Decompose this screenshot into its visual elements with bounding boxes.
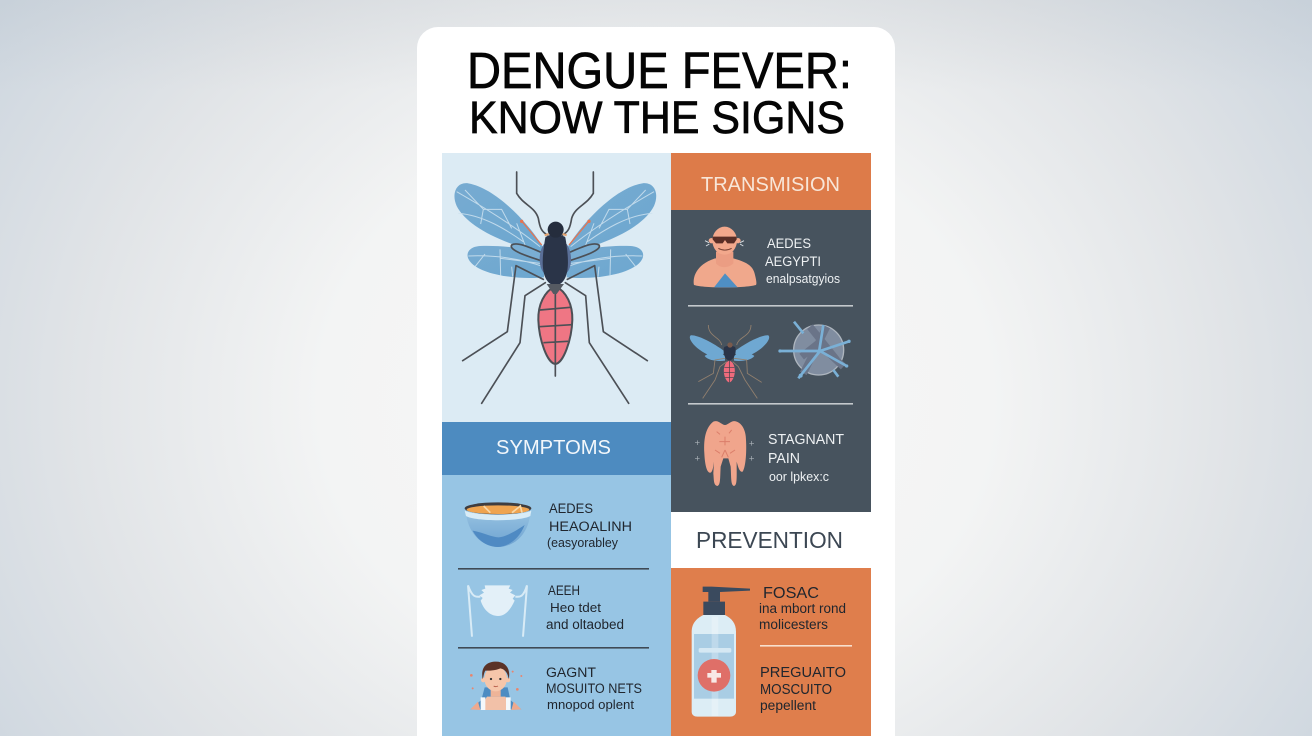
icon: man with sunglasses (694, 227, 756, 287)
icon: blocked net circle (778, 322, 851, 378)
symptom text: headache: AEDES (549, 501, 593, 516)
heading: prevention: PREVENTION (696, 527, 843, 553)
icon: small mosquito (690, 325, 769, 398)
symptom text: nets: GAGNT (546, 665, 596, 680)
transmission text: stagnant pain: PAIN (768, 451, 800, 467)
panel: prevention (671, 568, 871, 736)
transmission text: stagnant pain (768, 432, 844, 484)
infographic card (417, 27, 895, 736)
symptom text: headache: (easyorabley (547, 535, 618, 550)
transmission text: stagnant pain: oor lpkex:c (769, 469, 829, 484)
transmission text: stagnant pain: STAGNANT (768, 432, 844, 448)
prevention text: soap: ina mbort rond (759, 601, 846, 616)
symptom text: fever (546, 583, 624, 632)
icon: boy with symptoms (470, 662, 522, 710)
symptom text: fever: AEEH (548, 583, 580, 598)
title: DENGUE FEVER: (467, 42, 852, 99)
panel: symptoms heading (442, 422, 671, 475)
symptom text: headache (547, 501, 632, 550)
prevention text: soap (759, 585, 846, 632)
panel: transmission list (671, 210, 871, 512)
prevention text: mosquito repellent (760, 665, 846, 713)
symptom text: headache: HEAOALINH (549, 519, 632, 534)
symptom text: fever: and oltaobed (546, 617, 624, 632)
transmission text: aedes aegypti: enalpsatgyios (766, 271, 840, 286)
panel: transmission heading: TRANSMISION (701, 174, 840, 196)
prevention text: mosquito repellent: MOSCUITO (760, 682, 832, 698)
icon: skin rash hand (695, 421, 754, 486)
icon: large mosquito (454, 172, 656, 403)
prevention text: soap: molicesters (759, 617, 828, 632)
symptom text: fever: Heo tdet (550, 600, 601, 615)
prevention text: mosquito repellent: pepellent (760, 698, 816, 713)
symptom text: nets (546, 665, 642, 712)
title (467, 42, 852, 143)
panel: symptoms heading: SYMPTOMS (496, 436, 611, 459)
title: KNOW THE SIGNS (469, 92, 845, 143)
symptom text: nets: MOSUITO NETS (546, 681, 642, 696)
prevention text: soap: FOSAC (763, 585, 819, 602)
icon: white garment (468, 585, 527, 637)
panel: symptoms list (442, 475, 671, 736)
transmission text: aedes aegypti: AEDES (767, 236, 811, 251)
transmission text: aedes aegypti (765, 236, 840, 286)
icon: repellent bottle (692, 587, 750, 717)
prevention text: mosquito repellent: PREGUAITO (760, 665, 846, 681)
icon: bowl (465, 502, 531, 547)
transmission text: aedes aegypti: AEGYPTI (765, 254, 821, 269)
symptom text: nets: mnopod oplent (547, 697, 634, 712)
panel: transmission heading (671, 153, 871, 210)
panel: mosquito illustration (442, 153, 671, 422)
